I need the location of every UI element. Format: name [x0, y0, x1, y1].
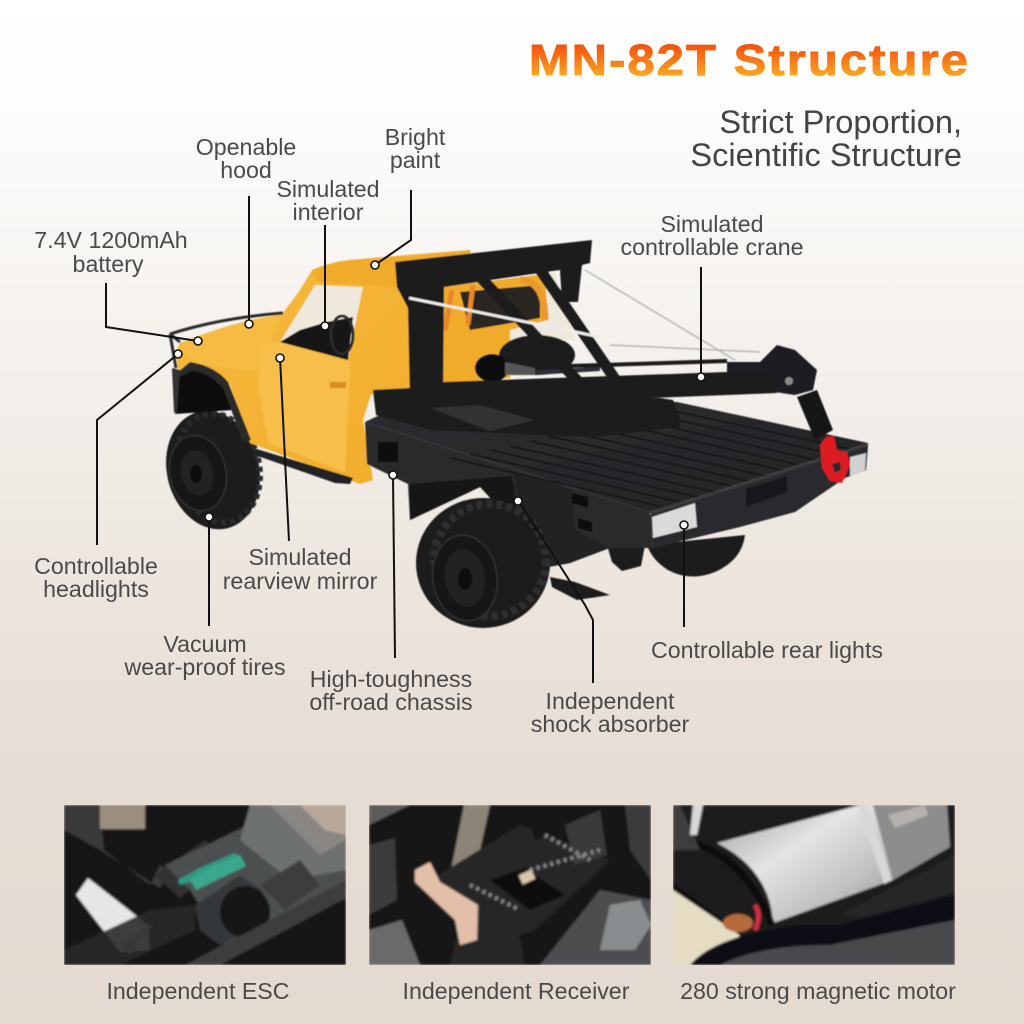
- interior: [280, 317, 353, 360]
- leader: chassis: [393, 475, 395, 658]
- label: crane: [620, 211, 804, 260]
- deck rear edge: [650, 443, 868, 518]
- label: simulated interior: interior: [293, 199, 364, 225]
- side cutouts: [572, 493, 592, 532]
- winch drums: [475, 335, 600, 382]
- door handle: [330, 382, 346, 388]
- boom elbow: [727, 345, 817, 395]
- hook arm: [797, 390, 833, 440]
- label: crane: Simulated: [660, 211, 764, 237]
- label: chassis: off-road chassis: [309, 689, 473, 715]
- hood panel: [181, 314, 283, 372]
- rear wheel: [416, 498, 550, 628]
- label: simulated interior: [276, 176, 380, 225]
- bed side: [365, 422, 652, 570]
- photo: strong magnetic motor: [673, 805, 955, 965]
- crane struts: [467, 255, 643, 423]
- label: rearview mirror: [223, 544, 378, 594]
- door panel: [258, 342, 350, 472]
- tail socket: [378, 442, 398, 462]
- caption: independent receiver: Independent Receiver: [403, 978, 630, 1004]
- cab rear and roof: [312, 250, 545, 395]
- crane mast frame: [395, 240, 592, 403]
- caption: independent ESC: Independent ESC: [106, 978, 290, 1004]
- label: bright paint: paint: [390, 147, 441, 173]
- callout dots: [174, 261, 705, 529]
- rear light left: [652, 503, 697, 538]
- label: rear lights: Controllable rear lights: [651, 637, 883, 663]
- photo: independent receiver: [369, 805, 651, 965]
- label: chassis: [309, 666, 473, 715]
- leader: headlights: [97, 354, 178, 545]
- crane boom: [443, 372, 777, 403]
- front wheel: [154, 401, 272, 539]
- label: tires: Vacuum: [163, 631, 247, 657]
- subtitle: [690, 103, 962, 173]
- label: openable hood: Openable: [196, 134, 296, 160]
- photo: independent ESC: [64, 805, 346, 965]
- label: openable hood: [196, 134, 296, 183]
- label: shock absorber: [531, 688, 690, 737]
- label: headlights: [34, 553, 158, 602]
- red hook: [820, 436, 850, 483]
- guy wires: [585, 270, 760, 360]
- caption: strong magnetic motor: 280 strong magnetic motor: [680, 978, 956, 1004]
- label: bright paint: Bright: [385, 124, 446, 150]
- leader: rear lights: [683, 525, 685, 627]
- wheel well: [175, 366, 232, 414]
- leader: shock absorber: [518, 500, 593, 683]
- label: battery: [34, 227, 188, 277]
- cab rear panel behind mast: [443, 274, 548, 382]
- bumper: [172, 368, 180, 414]
- bed rear face: [650, 446, 868, 548]
- leader: simulated interior: [324, 225, 326, 325]
- crane base plate: [373, 388, 680, 437]
- winch cable: [409, 298, 600, 337]
- shock absorber: [550, 577, 610, 600]
- far rear wheel: [647, 535, 745, 577]
- label: shock absorber: shock absorber: [531, 711, 690, 737]
- underbody mechanics: [607, 545, 645, 571]
- label: openable hood: hood: [220, 157, 272, 183]
- view through mast window: [443, 272, 575, 340]
- side window glass: [280, 285, 363, 360]
- leader: battery: [106, 283, 198, 341]
- orange roll bar: [445, 285, 473, 330]
- leader: bright paint: [375, 190, 411, 265]
- leader lines: [97, 190, 705, 683]
- subtitle: Strict Proportion,: [719, 103, 962, 140]
- leader: openable hood: [248, 196, 250, 324]
- cab body: [176, 270, 410, 484]
- dark rear window: [460, 285, 540, 330]
- truck photo: [154, 240, 868, 628]
- label: rearview mirror: Simulated: [248, 544, 352, 570]
- fender flare: [178, 362, 251, 442]
- label: rearview mirror: rearview mirror: [223, 568, 378, 594]
- label: shock absorber: Independent: [546, 688, 675, 714]
- bed shadow area: [410, 476, 520, 530]
- title: MN-82T Structure: [529, 36, 970, 85]
- leader: mirror: [280, 357, 289, 541]
- label: headlights: headlights: [43, 576, 149, 602]
- leader: crane: [700, 267, 702, 377]
- leader: tires: [208, 517, 210, 626]
- side step: [250, 447, 353, 484]
- bed fender: [513, 472, 608, 570]
- label: bright paint: [385, 124, 446, 173]
- label: tires: [123, 631, 286, 680]
- label: battery: 7.4V 1200mAh: [34, 227, 188, 253]
- rear light right: [850, 453, 866, 477]
- deck slats: [450, 408, 850, 507]
- subtitle: Scientific Structure: [690, 136, 962, 173]
- rear recess: [746, 476, 787, 507]
- label: headlights: Controllable: [34, 553, 158, 579]
- label: crane: controllable crane: [620, 234, 804, 260]
- label: simulated interior: Simulated: [276, 176, 380, 202]
- hood guard: [170, 313, 283, 368]
- grille on base plate: [430, 405, 535, 431]
- deck: [365, 396, 868, 512]
- boom upper rail: [570, 361, 727, 366]
- label: chassis: High-toughness: [310, 666, 472, 692]
- label: tires: wear-proof tires: [123, 654, 286, 680]
- label: battery: battery: [73, 251, 144, 277]
